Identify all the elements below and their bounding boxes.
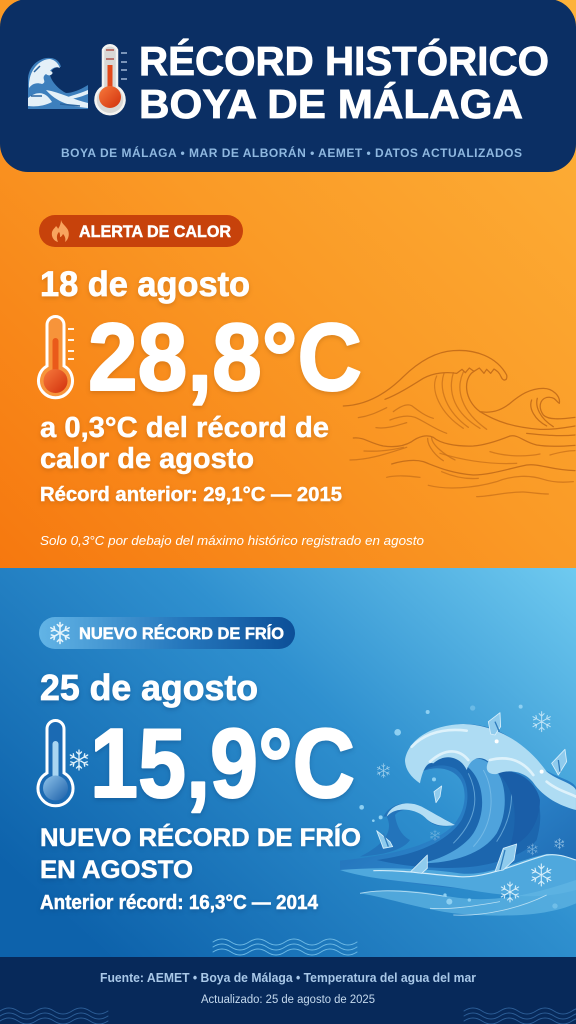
source: Fuente: AEMET • Boya de Málaga • Temperatura del agua del mar [100,971,476,985]
date: 18 de agosto: 18 de agosto [40,265,250,304]
title [139,38,549,127]
subhead: near record: a 0,3°C del récord de [40,412,329,444]
icon: red thermometer [96,45,127,114]
panel: heat alert [0,0,576,568]
alert pill: ALERTA DE CALOR [79,222,231,241]
subhead: new cold record: EN AGOSTO [40,856,193,884]
icon: snowflake [51,622,69,644]
icon: cold thermometer [38,720,88,806]
ice wave illustration [340,705,576,916]
ice dots [359,705,558,909]
value: 15,9°C: 15,9°C [90,708,355,818]
subhead: near record: calor de agosto [40,443,254,475]
subhead: new cold record: NUEVO RÉCORD DE FRÍO [40,823,361,852]
icon: flame [52,220,69,242]
alert pill [39,215,243,247]
ice crystals [377,713,567,873]
footer [0,957,576,1024]
updated: Actualizado: 25 de agosto de 2025 [201,994,375,1006]
cold pill: NUEVO RÉCORD DE FRÍO [79,624,284,643]
title: RÉCORD HISTÓRICO [139,38,549,84]
panel: cold record [0,568,576,958]
cold pill [39,617,295,649]
subhead: near record [40,412,329,475]
header banner [0,0,576,172]
subhead: new cold record [40,823,361,884]
icon: hot thermometer [38,316,74,398]
title: BOYA DE MÁLAGA [139,81,523,127]
note: Solo 0,3°C por debajo del máximo histórico registrado en agosto [40,534,424,548]
value: 28,8°C: 28,8°C [88,304,362,411]
previous record: Récord anterior: 29,1°C — 2015 [40,483,342,506]
subtitle: BOYA DE MÁLAGA • MAR DE ALBORÁN • AEMET • DATOS ACTUALIZADOS [61,145,522,160]
snowflakes [377,712,564,902]
icon: great wave [28,58,88,109]
date: 25 de agosto: 25 de agosto [40,667,258,708]
wave line art [343,350,575,497]
previous cold record: Anterior récord: 16,3°C — 2014 [40,892,319,914]
